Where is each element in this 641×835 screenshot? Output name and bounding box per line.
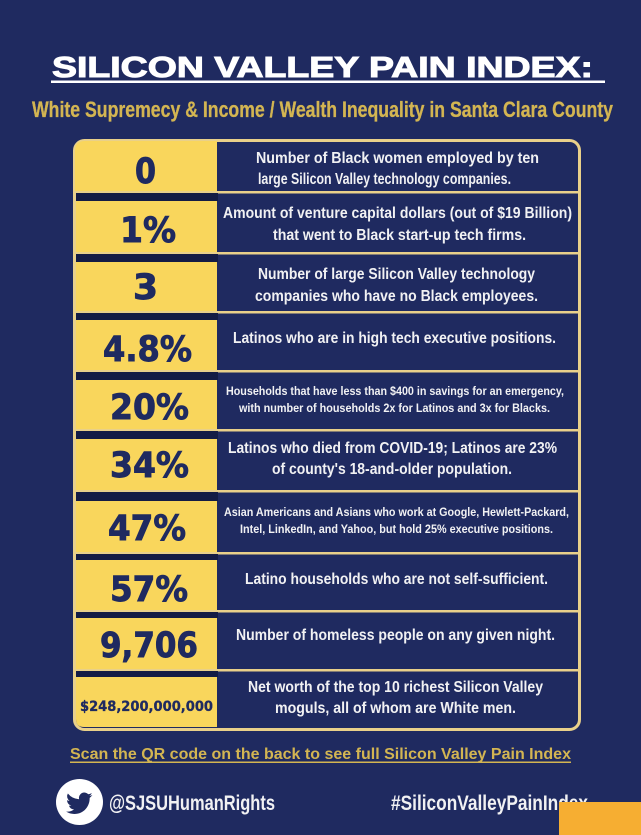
row: 9,706: Number of homeless people on any given night. <box>236 627 555 644</box>
orange corner block <box>559 802 641 835</box>
row: 3: companies who have no Black employees. <box>255 288 538 305</box>
row: 1% <box>76 201 578 262</box>
row: 47% <box>76 501 578 560</box>
row: 9,706: 9,706 <box>100 626 198 666</box>
handle: @SJSUHumanRights <box>109 792 275 815</box>
row: 34%: of county's 18-and-older population. <box>272 461 512 478</box>
panel: index table <box>74 140 580 730</box>
row: $248,200,000,000: moguls, all of whom are White men. <box>275 700 516 717</box>
row: 0: 0 <box>135 152 156 192</box>
row: 47%: Intel, LinkedIn, and Yahoo, but hold 25% executive positions. <box>240 522 553 536</box>
row: 47%: 47% <box>108 509 186 549</box>
row: 20% <box>76 380 578 439</box>
row: $248,200,000,000: $248,200,000,000 <box>80 699 213 715</box>
row: 47%: Asian Americans and Asians who work at Google, Hewlett-Packard, <box>224 505 569 519</box>
row: 20%: with number of households 2x for Latinos and 3x for Blacks. <box>238 401 550 415</box>
row: 4.8%: 4.8% <box>103 330 192 370</box>
hashtag: #SiliconValleyPainIndex <box>391 792 588 815</box>
row: 57%: Latino households who are not self-sufficient. <box>245 571 548 588</box>
row: 0: large Silicon Valley technology companies. <box>258 171 511 188</box>
row: 9,706 <box>76 618 578 677</box>
row: 34% <box>76 439 578 501</box>
row: 3 <box>76 262 578 320</box>
call to action: Scan the QR code on the back to see full Silicon Valley Pain Index <box>70 746 571 763</box>
row: $248,200,000,000: Net worth of the top 10 richest Silicon Valley <box>248 679 543 696</box>
row: 0 <box>135 150 578 194</box>
row: 20%: 20% <box>110 388 189 428</box>
row: 57%: 57% <box>110 570 188 610</box>
row: 34%: Latinos who died from COVID-19; Latinos are 23% <box>228 440 557 457</box>
row: 0: Number of Black women employed by ten <box>256 150 539 167</box>
row: 4.8%: Latinos who are in high tech executive positions. <box>233 330 556 347</box>
row: 20%: Households that have less than $400 in savings for an emergency, <box>226 384 564 398</box>
row: 1%: Amount of venture capital dollars (out of $19 Billion) <box>223 205 572 222</box>
row: 1%: that went to Black start-up tech firms. <box>273 227 526 244</box>
row: $248,200,000,000 <box>76 677 543 727</box>
row: 4.8% <box>76 320 578 380</box>
row: 3: 3 <box>133 268 158 308</box>
row: 34%: 34% <box>110 446 189 486</box>
icon: twitter <box>56 779 103 825</box>
title: SILICON VALLEY PAIN INDEX: <box>52 52 593 84</box>
row: 57% <box>76 560 578 618</box>
row: 1%: 1% <box>120 211 176 251</box>
row: 3: Number of large Silicon Valley technology <box>258 266 535 283</box>
